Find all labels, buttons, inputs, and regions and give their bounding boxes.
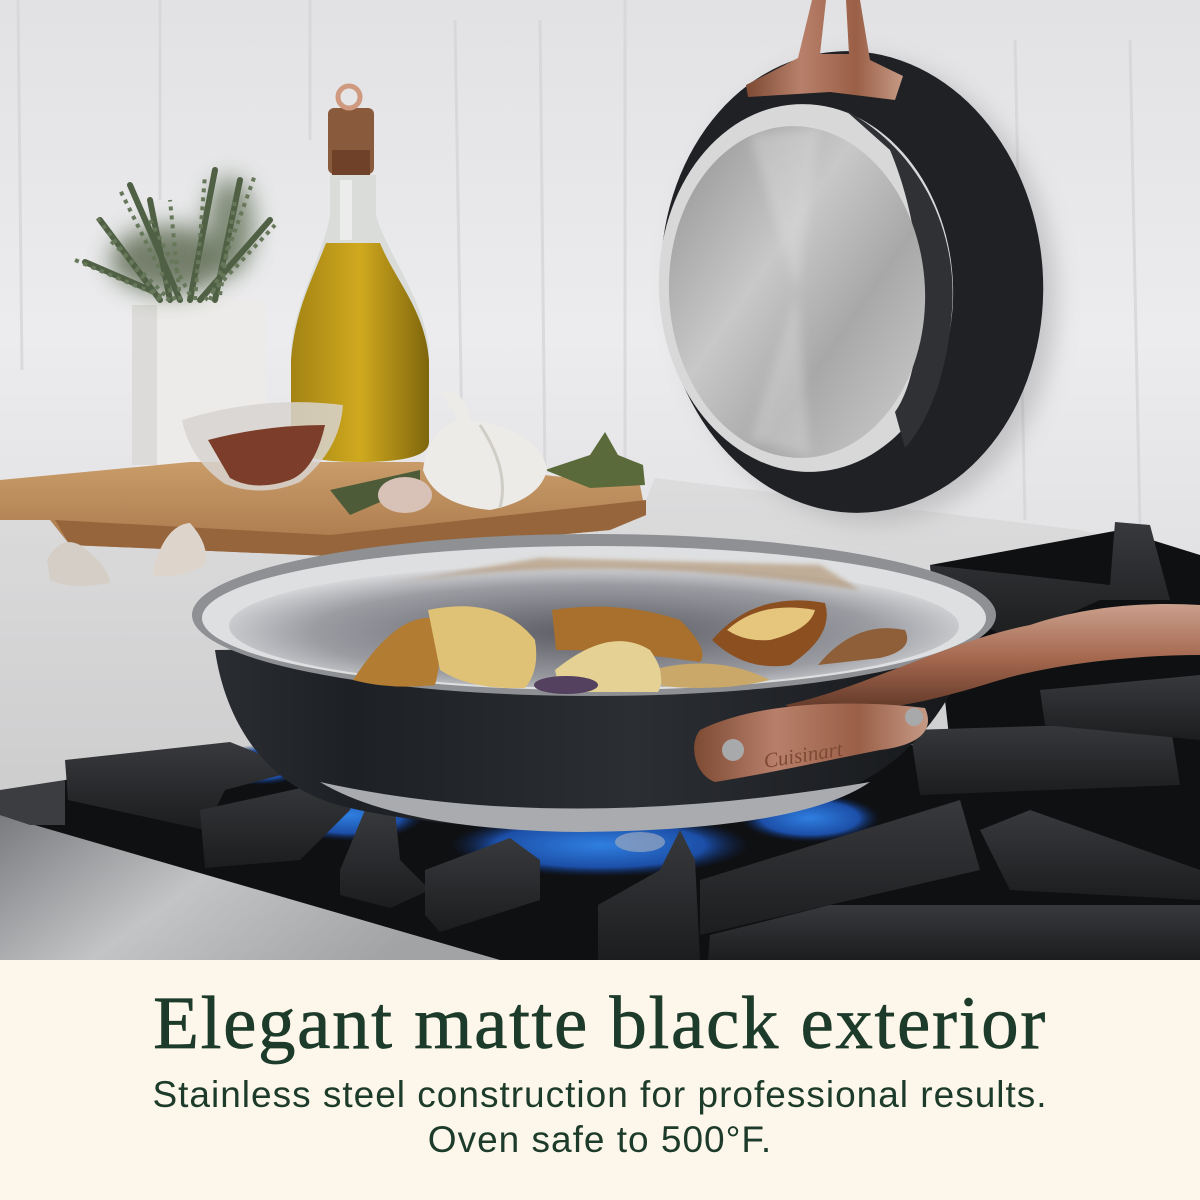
- stove base and burner: [0, 530, 1200, 960]
- subheading: Stainless steel construction for professional results.: [152, 1074, 1048, 1115]
- cutting board: [0, 462, 646, 556]
- caption band: [0, 960, 1200, 1200]
- garlic and rosemary: [47, 392, 645, 586]
- handle plate with Cuisinart logo: [694, 703, 928, 782]
- main frying pan: [192, 534, 1200, 832]
- pan interior: [229, 564, 959, 688]
- pan rim: [192, 534, 996, 696]
- pan exterior: [215, 640, 975, 829]
- countertop: [0, 478, 1200, 800]
- heading: Elegant matte black exterior: [153, 982, 1047, 1065]
- blue flames: [210, 745, 880, 877]
- olive oil bottle: [291, 86, 429, 462]
- stainless cooktop trim: [0, 780, 500, 960]
- rosemary pot: [75, 170, 275, 467]
- spice bowl: [182, 402, 343, 491]
- cast iron grates: [65, 522, 1200, 960]
- pan copper handle: [785, 604, 1200, 712]
- roasted potatoes: [353, 600, 907, 694]
- hanging pan on wall: [645, 0, 1079, 541]
- photo: frying pan on gas stove in a kitchen: [0, 0, 1200, 960]
- tiled wall: [0, 0, 1200, 560]
- subheading: [152, 1074, 1048, 1160]
- handle plate with Cuisinart logo: Cuisinart: [762, 737, 845, 773]
- subheading: Oven safe to 500°F.: [428, 1119, 772, 1160]
- hanging pan copper handle: [746, 0, 903, 100]
